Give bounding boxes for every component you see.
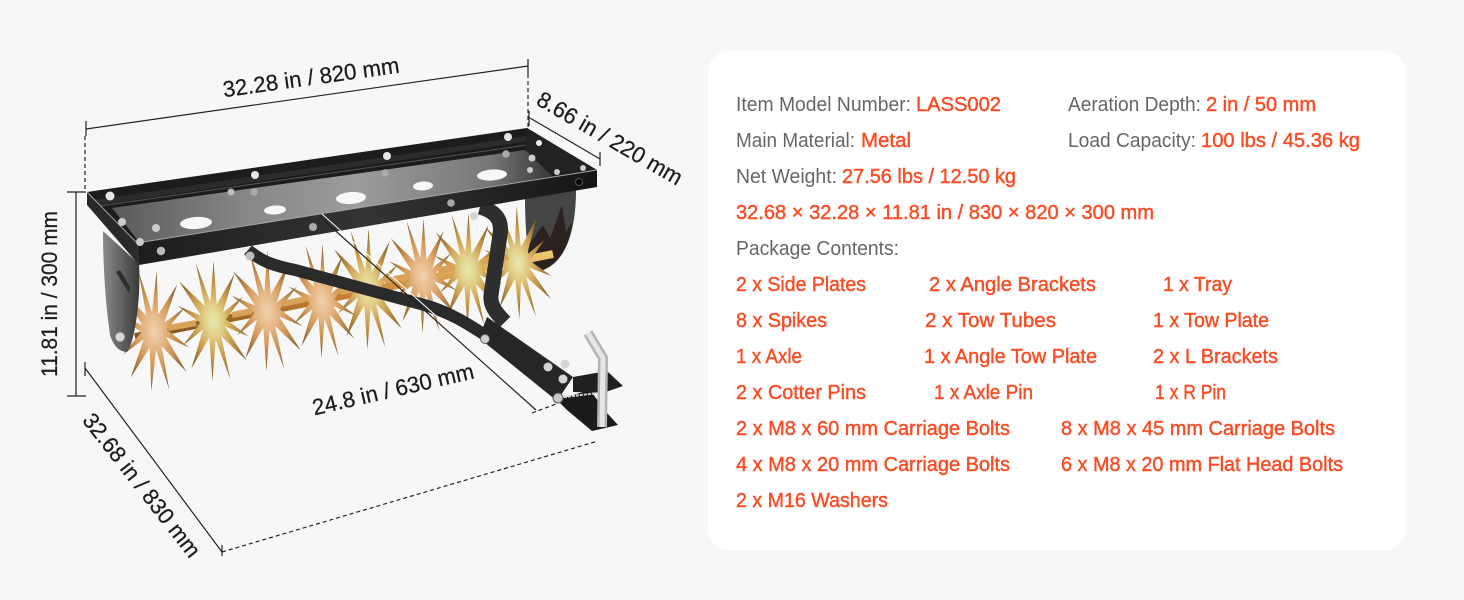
package contents list: 2 x L Brackets <box>1153 346 1278 368</box>
dimension label: width: 32.28 in / 820 mm <box>221 53 401 102</box>
tray back wall and floor <box>87 128 597 243</box>
tow plate <box>556 371 623 431</box>
package contents list: 2 x Cotter Pins <box>736 382 866 404</box>
tray large holes <box>180 168 507 230</box>
tray small holes and bolts <box>106 133 586 255</box>
spec: net weight <box>736 166 1016 188</box>
dimension label: tow bar: 24.8 in / 630 mm <box>310 359 476 420</box>
axle highlights <box>168 257 508 328</box>
spec: net weight: Net Weight: <box>736 166 837 188</box>
spec: aeration depth <box>1068 94 1316 116</box>
package contents list: 1 x Angle Tow Plate <box>924 346 1097 368</box>
package contents list: 2 x Side Plates <box>736 274 866 296</box>
package contents list <box>736 274 1343 512</box>
package contents list: 1 x R Pin <box>1155 382 1226 404</box>
spec: load capacity: 100 lbs / 45.36 kg <box>1201 130 1360 152</box>
package contents list: 8 x M8 x 45 mm Carriage Bolts <box>1061 418 1335 440</box>
spiked discs <box>115 203 558 394</box>
tow tube bolts <box>246 212 570 403</box>
tow tube: right <box>480 207 505 322</box>
package contents list: 2 x M8 x 60 mm Carriage Bolts <box>736 418 1010 440</box>
product: lawn aerator illustration <box>87 128 623 431</box>
package contents list: 2 x Tow Tubes <box>925 310 1056 332</box>
package contents list: 1 x Tow Plate <box>1153 310 1269 332</box>
panel: specifications <box>708 51 1406 550</box>
package contents list: 6 x M8 x 20 mm Flat Head Bolts <box>1061 454 1343 476</box>
axle <box>135 254 553 337</box>
spec: load capacity: Load Capacity: <box>1068 130 1196 152</box>
spec: item model number: LASS002 <box>916 94 1001 116</box>
package contents list: 1 x Tray <box>1163 274 1232 296</box>
right side plate <box>525 190 576 270</box>
tow tube: merged end <box>479 317 573 401</box>
spec: main material: Main Material: <box>736 130 855 152</box>
dimension label: depth of tray: 8.66 in / 220 mm <box>532 87 687 190</box>
package contents list: 4 x M8 x 20 mm Carriage Bolts <box>736 454 1010 476</box>
spec: net weight: 27.56 lbs / 12.50 kg <box>842 166 1016 188</box>
spec: main material: Metal <box>861 130 911 152</box>
spec: load capacity <box>1068 130 1360 152</box>
spec: aeration depth: 2 in / 50 mm <box>1206 94 1316 116</box>
tray front and left rails <box>87 170 597 265</box>
dimension label: height: 11.81 in / 300 mm <box>37 211 62 377</box>
package contents list: 2 x M16 Washers <box>736 490 888 512</box>
spec: item model number: Item Model Number: <box>736 94 911 116</box>
package contents list: 8 x Spikes <box>736 310 827 332</box>
R pin <box>588 333 603 427</box>
spec: aeration depth: Aeration Depth: <box>1068 94 1201 116</box>
left side plate <box>103 231 139 352</box>
package contents list: 1 x Axle Pin <box>934 382 1033 404</box>
spec: overall dimensions: 32.68 × 32.28 × 11.81 in / 830 × 820 × 300 mm <box>736 202 1154 224</box>
tow tube: left <box>248 250 485 335</box>
dimension label: overall length: 32.68 in / 830 mm <box>78 408 206 562</box>
dimension lines <box>67 59 600 556</box>
heading: package contents: Package Contents: <box>736 238 899 260</box>
package contents list: 1 x Axle <box>736 346 802 368</box>
spec: item model number <box>736 94 1001 116</box>
package contents list: 2 x Angle Brackets <box>929 274 1096 296</box>
